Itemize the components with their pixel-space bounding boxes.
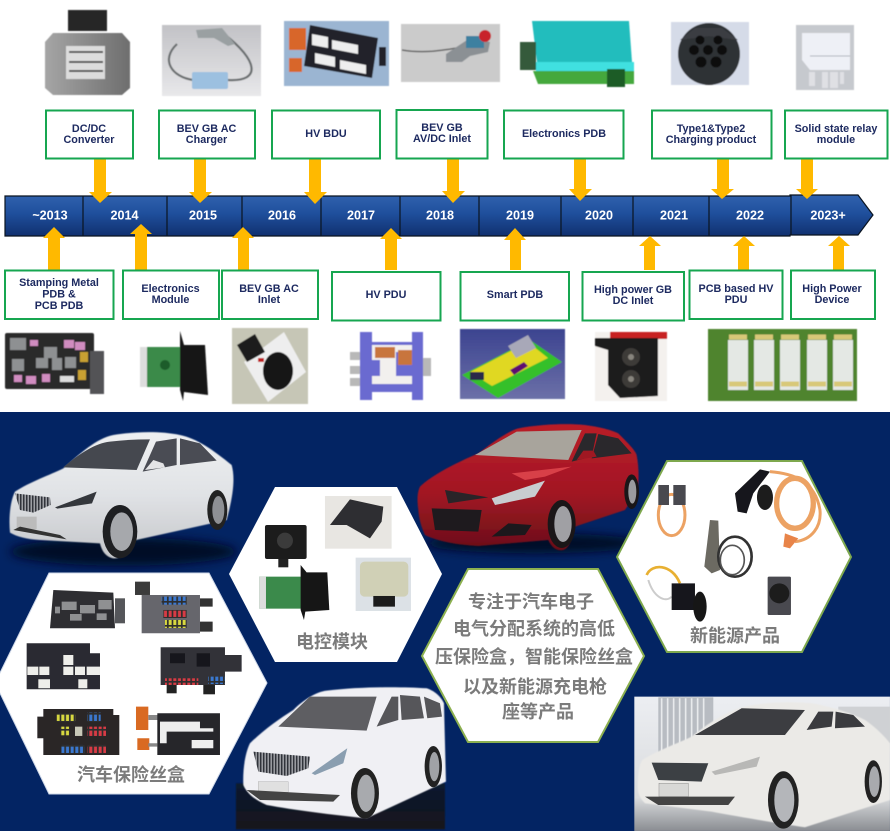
bottom label: Stamping Metal PDB & PCB PDB: PCB PDB — [35, 300, 83, 312]
icon: Type 2 connector photo — [671, 22, 749, 85]
photo: white Geely sedan — [634, 697, 890, 831]
timeline bar: 2014 — [110, 208, 139, 222]
icon: solid state relay photo — [796, 25, 854, 90]
top label: HV BDU — [272, 110, 380, 158]
top label: Type1&Type2 Charging product — [652, 110, 772, 158]
timeline bar: 2018 — [426, 208, 454, 222]
bottom label: Smart PDB: Smart PDB — [487, 289, 543, 301]
top label: BEV GB AV/DC Inlet: AV/DC Inlet — [413, 133, 471, 145]
icon: smart PDB photo — [460, 329, 565, 399]
top label: Solid state relay module: Solid state relay — [795, 123, 877, 135]
bottom label: BEV GB AC Inlet: Inlet — [258, 294, 280, 306]
icon: AC charger photo — [162, 25, 261, 96]
focus statement text: 电气分配系统的高低 — [453, 618, 615, 639]
bottom label: Electronics Module: Electronics — [141, 283, 200, 295]
icon: electronics module photo — [140, 331, 208, 401]
bottom label: High power GB DC Inlet: DC Inlet — [613, 295, 654, 307]
timeline bar — [5, 195, 873, 236]
panel: electronic control modules hexagon — [229, 487, 442, 662]
icon: electronics PDB photo — [520, 21, 634, 87]
top label: BEV GB AC Charger — [159, 110, 255, 158]
bottom label: Stamping Metal PDB & PCB PDB: PDB & — [42, 288, 76, 300]
timeline bar: 2015 — [189, 208, 217, 222]
bottom label: High power GB DC Inlet: High power GB — [594, 284, 672, 296]
bottom label: HV PDU — [332, 272, 440, 320]
focus statement text — [435, 591, 633, 722]
control module product cluster — [259, 496, 411, 620]
top label: Type1&Type2 Charging product: Type1&Type2 — [677, 123, 745, 135]
timeline bar: 2021 — [660, 208, 688, 222]
bottom label: Stamping Metal PDB & PCB PDB: Stamping Metal — [19, 277, 99, 289]
top label: BEV GB AC Charger: BEV GB AC — [177, 123, 236, 135]
photo: white MPV — [236, 687, 446, 829]
top label: Solid state relay module — [785, 110, 888, 158]
panel: auto fuse boxes hexagon — [0, 573, 267, 794]
bottom label: PCB based HV PDU: PDU — [725, 294, 748, 306]
icon: GB AC inlet photo — [232, 328, 308, 404]
photo: silver sedan — [9, 432, 237, 566]
timeline bar: ~2013 — [32, 208, 68, 222]
fuse box product cluster — [27, 582, 242, 755]
timeline bar: 2017 — [347, 208, 375, 222]
bottom label: BEV GB AC Inlet — [222, 270, 318, 319]
arrows pointing down from top labels — [89, 159, 818, 204]
icon: AV/DC inlet photo — [401, 24, 500, 82]
icon: HV PDU photo — [350, 332, 431, 400]
label: new energy products: 新能源产品 — [690, 625, 780, 646]
top label: DC/DC Converter: DC/DC — [72, 123, 106, 135]
panel: company focus hexagon — [422, 569, 644, 742]
bottom label: Electronics Module — [123, 270, 219, 319]
panel: dark navy products background — [0, 412, 890, 831]
bottom label: PCB based HV PDU: PCB based HV — [698, 283, 774, 295]
top label: BEV GB AV/DC Inlet: BEV GB — [421, 122, 463, 134]
top label: HV BDU: HV BDU — [305, 128, 347, 140]
bottom label: PCB based HV PDU — [690, 270, 782, 319]
top label: DC/DC Converter — [46, 110, 133, 158]
bottom label: High Power Device — [791, 270, 875, 319]
top label: BEV GB AV/DC Inlet — [396, 110, 488, 158]
focus statement text: 座等产品 — [502, 701, 574, 722]
panel: new energy products hexagon — [617, 461, 851, 652]
arrows pointing up from bottom labels — [43, 224, 850, 270]
bottom label: High power GB DC Inlet — [582, 272, 684, 320]
bottom label: BEV GB AC Inlet: BEV GB AC — [239, 283, 299, 295]
top label: Type1&Type2 Charging product: Charging product — [666, 134, 757, 146]
focus statement text: 专注于汽车电子 — [468, 591, 594, 612]
bottom label: Smart PDB — [460, 272, 569, 320]
timeline bar: 2022 — [736, 208, 764, 222]
icon: stamping PDB photo — [5, 333, 104, 394]
icon: high power DC inlet photo — [595, 332, 667, 401]
icon: DC/DC converter photo — [45, 10, 130, 95]
timeline bar: 2020 — [585, 208, 613, 222]
photo: red sedan — [418, 424, 645, 553]
top label: BEV GB AC Charger: Charger — [186, 134, 228, 146]
focus statement text: 压保险盒，智能保险丝盒 — [435, 646, 633, 667]
icon: HV BDU photo — [284, 21, 389, 86]
bottom label: HV PDU: HV PDU — [366, 289, 407, 301]
bottom label: High Power Device: High Power — [802, 283, 862, 295]
bottom label: Electronics Module: Module — [152, 294, 189, 306]
top label: Solid state relay module: module — [817, 134, 855, 146]
top label: Electronics PDB — [504, 110, 624, 158]
top label: DC/DC Converter: Converter — [63, 134, 115, 146]
icon: PCB based HV PDU photo — [708, 329, 857, 401]
panel: product development timeline — [5, 110, 888, 320]
new energy product cluster — [647, 469, 820, 622]
bottom label: Stamping Metal PDB & PCB PDB — [5, 270, 114, 319]
timeline bar: 2023+ — [810, 208, 846, 222]
focus statement text: 以及新能源充电枪 — [463, 676, 607, 697]
top label: Electronics PDB: Electronics PDB — [522, 128, 606, 140]
bottom label: High Power Device: Device — [815, 294, 849, 306]
timeline bar: 2019 — [506, 208, 534, 222]
timeline bar: 2016 — [268, 208, 296, 222]
label: electronic control module: 电控模块 — [296, 631, 368, 652]
label: auto fuse box: 汽车保险丝盒 — [77, 764, 185, 785]
